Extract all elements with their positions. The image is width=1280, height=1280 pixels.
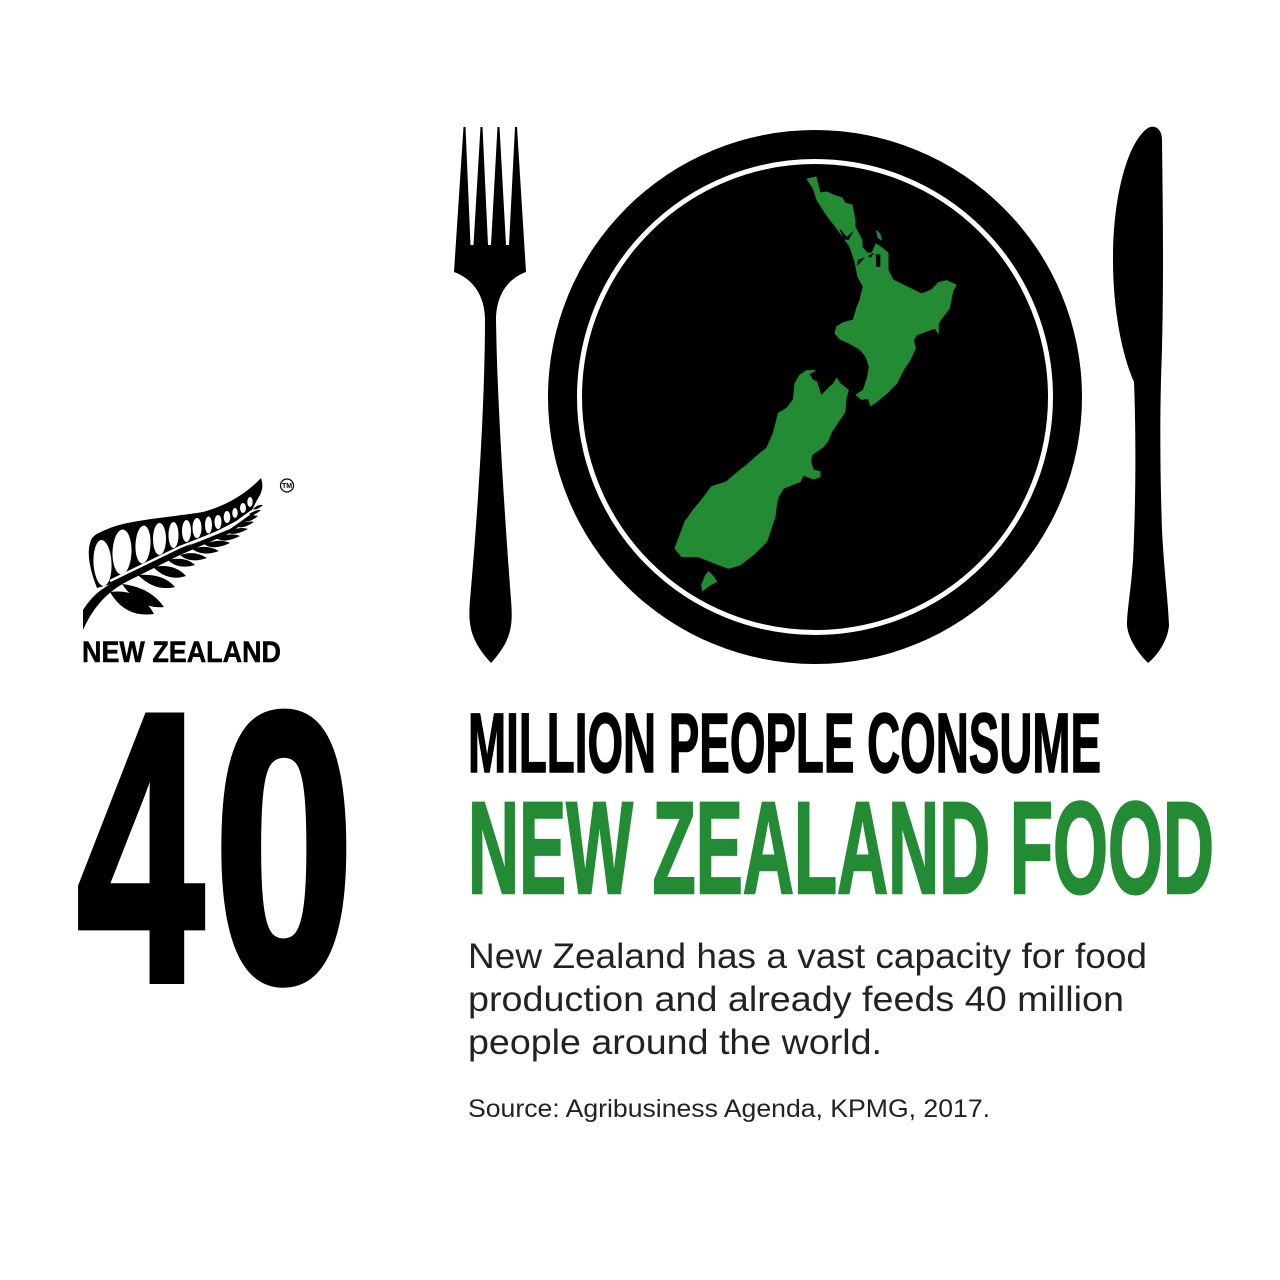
big number 40: 4 — [77, 634, 205, 1062]
body text: production and already feeds 40 million — [468, 980, 1124, 1019]
icon: silver fern — [83, 478, 263, 630]
body text — [468, 937, 1147, 1062]
icon: fork — [454, 127, 526, 663]
logo: silver fern New Zealand — [82, 478, 294, 669]
icon: trademark symbol: TM — [282, 483, 292, 490]
logo wordmark: NEW ZEALAND — [82, 636, 281, 669]
map: New Zealand — [675, 177, 956, 591]
icon: knife — [1113, 127, 1169, 663]
big number 40: 0 — [214, 634, 354, 1062]
body text: people around the world. — [468, 1023, 882, 1062]
body text: New Zealand has a vast capacity for food — [468, 937, 1147, 976]
icon: plate with New Zealand map — [548, 130, 1082, 664]
icon: trademark symbol — [280, 479, 294, 492]
source note: Source: Agribusiness Agenda, KPMG, 2017. — [468, 1095, 990, 1123]
